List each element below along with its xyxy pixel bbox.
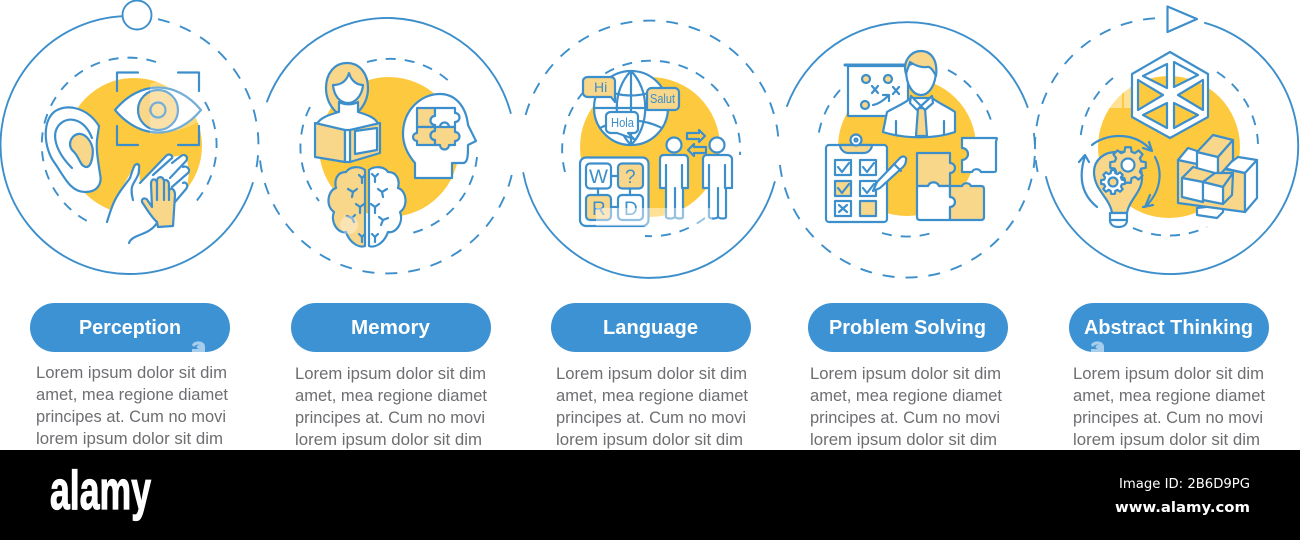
- text block: perception description: principes at. Cum no movi: [36, 407, 226, 426]
- pill: Language: Language: [603, 317, 698, 339]
- icon: word grid: W: [589, 167, 608, 188]
- icon: stacked boxes: [1178, 135, 1257, 218]
- icon: checklist clipboard: [826, 134, 906, 222]
- panel: perception circle: [1, 0, 258, 274]
- image id: Image ID: 2B6D9PG: [1119, 477, 1250, 492]
- watermark ghost bars: [1108, 88, 1132, 108]
- text block: problem solving description: Lorem ipsum dolor sit dim: [810, 364, 1001, 383]
- text block: perception description: Lorem ipsum dolor sit dim: [36, 363, 227, 382]
- text block: language description: amet, mea regione diamet: [556, 386, 748, 405]
- text block: memory description: Lorem ipsum dolor sit dim: [295, 364, 486, 383]
- icon: open hand: [107, 155, 189, 243]
- text block: abstract thinking description: principes at. Cum no movi: [1073, 408, 1263, 427]
- icon: small hand: [142, 177, 175, 227]
- text block: perception description: lorem ipsum dolor sit dim: [36, 429, 223, 448]
- icon: word grid: [580, 158, 648, 226]
- logo: alamy: alamy: [50, 459, 151, 521]
- icon: word grid: ?: [625, 167, 636, 188]
- text block: problem solving description: lorem ipsum dolor sit dim: [810, 430, 997, 449]
- panel: problem solving circle: [779, 22, 1035, 278]
- text block: problem solving description: principes at. Cum no movi: [810, 408, 1000, 427]
- pill: Problem Solving: [808, 303, 1008, 352]
- icon: globe with speech bubbles: Hi: [594, 79, 607, 95]
- pill: Abstract Thinking: [1069, 303, 1269, 352]
- text block: problem solving description: amet, mea regione diamet: [810, 386, 1002, 405]
- text block: language description: Lorem ipsum dolor sit dim: [556, 364, 747, 383]
- panel: language circle: [523, 21, 779, 278]
- icon: jigsaw pieces: [917, 138, 997, 220]
- icon: globe with speech bubbles: [583, 71, 679, 145]
- text block: memory description: principes at. Cum no movi: [295, 408, 485, 427]
- icon: word grid: D: [624, 199, 638, 220]
- website: www.alamy.com: [1115, 500, 1250, 516]
- icon: impossible cube: [1132, 52, 1208, 138]
- text block: abstract thinking description: Lorem ipsum dolor sit dim: [1073, 364, 1264, 383]
- pill: Perception: [30, 303, 230, 352]
- icon: eye in frame: [115, 72, 201, 145]
- text block: abstract thinking description: lorem ipsum dolor sit dim: [1073, 430, 1260, 449]
- pill: Memory: [291, 303, 491, 352]
- text block: problem solving description: [810, 364, 1002, 449]
- finger lines: [157, 181, 169, 200]
- text block: language description: lorem ipsum dolor sit dim: [556, 430, 743, 449]
- pill: Perception: Perception: [79, 317, 181, 339]
- pill: Language: [551, 303, 751, 352]
- text block: perception description: [36, 363, 228, 448]
- icon: light bulb with gears: [1079, 136, 1160, 227]
- pill: Abstract Thinking: Abstract Thinking: [1084, 317, 1253, 339]
- icon: tactic board: [845, 65, 908, 116]
- icon: businessman: [883, 51, 955, 137]
- pill: Problem Solving: Problem Solving: [829, 317, 986, 339]
- icon: woman reading book: [315, 63, 380, 162]
- icon: word grid: R: [592, 199, 606, 220]
- text block: language description: principes at. Cum no movi: [556, 408, 746, 427]
- text block: memory description: amet, mea regione diamet: [295, 386, 487, 405]
- icon: head with puzzle: [403, 94, 476, 178]
- text block: abstract thinking description: [1073, 364, 1265, 449]
- icon: two people exchanging: [660, 130, 732, 218]
- text block: memory description: [295, 364, 487, 449]
- panel: abstract thinking circle: [1035, 6, 1298, 274]
- icon: globe with speech bubbles: Hola: [611, 115, 635, 130]
- icon: brain: [328, 167, 406, 246]
- pill: Memory: Memory: [351, 317, 431, 339]
- watermark ghost on eye: [150, 81, 205, 134]
- text block: perception description: amet, mea regione diamet: [36, 385, 228, 404]
- panel: memory circle: [260, 18, 512, 273]
- icon: ear: [46, 107, 101, 192]
- icon: globe with speech bubbles: Salut: [650, 91, 675, 106]
- text block: abstract thinking description: amet, mea regione diamet: [1073, 386, 1265, 405]
- watermark ghost on grid: [596, 208, 712, 226]
- text block: memory description: lorem ipsum dolor sit dim: [295, 430, 482, 449]
- footer bar: [0, 450, 1300, 540]
- text block: language description: [556, 364, 748, 449]
